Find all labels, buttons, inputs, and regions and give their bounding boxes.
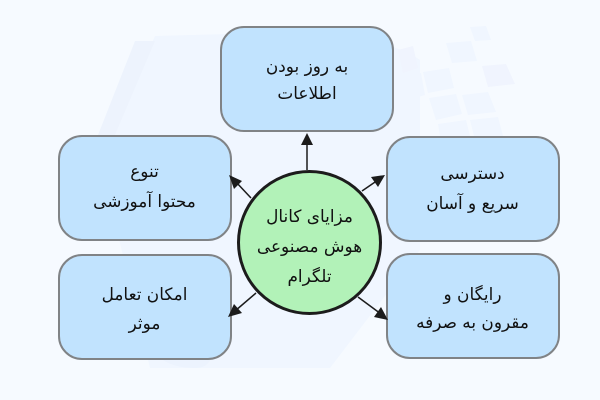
arrow: lower right [358, 297, 388, 320]
panel: up-to-date information [220, 26, 394, 132]
panel: content variety: تنوع [130, 161, 159, 181]
panel: effective interaction [58, 254, 232, 360]
central circle: مزایای کانال [266, 206, 353, 226]
central circle [237, 170, 382, 315]
panel: free and affordable: مقرون به صرفه [416, 312, 529, 332]
panel: free and affordable [386, 252, 560, 358]
arrow: upper left [229, 175, 251, 198]
panel: content variety [58, 134, 232, 240]
arrow: top [301, 133, 313, 170]
panel: quick and easy access: سریع و آسان [426, 193, 519, 213]
panel: free and affordable: رایگان و [444, 284, 501, 304]
panel: content variety: محتوا آموزشی [93, 191, 196, 211]
central circle: هوش مصنوعی [257, 236, 362, 256]
arrow: lower left [228, 293, 256, 317]
panel: effective interaction: امکان تعامل [102, 284, 187, 304]
panel: quick and easy access [386, 136, 560, 242]
panel: up-to-date information: به روز بودن [266, 56, 348, 76]
arrow: upper right [362, 175, 385, 191]
panel: effective interaction: موثر [129, 312, 160, 332]
panel: up-to-date information: اطلاعات [277, 83, 337, 103]
central circle: تلگرام [287, 266, 332, 286]
panel: quick and easy access: دسترسی [440, 163, 505, 183]
